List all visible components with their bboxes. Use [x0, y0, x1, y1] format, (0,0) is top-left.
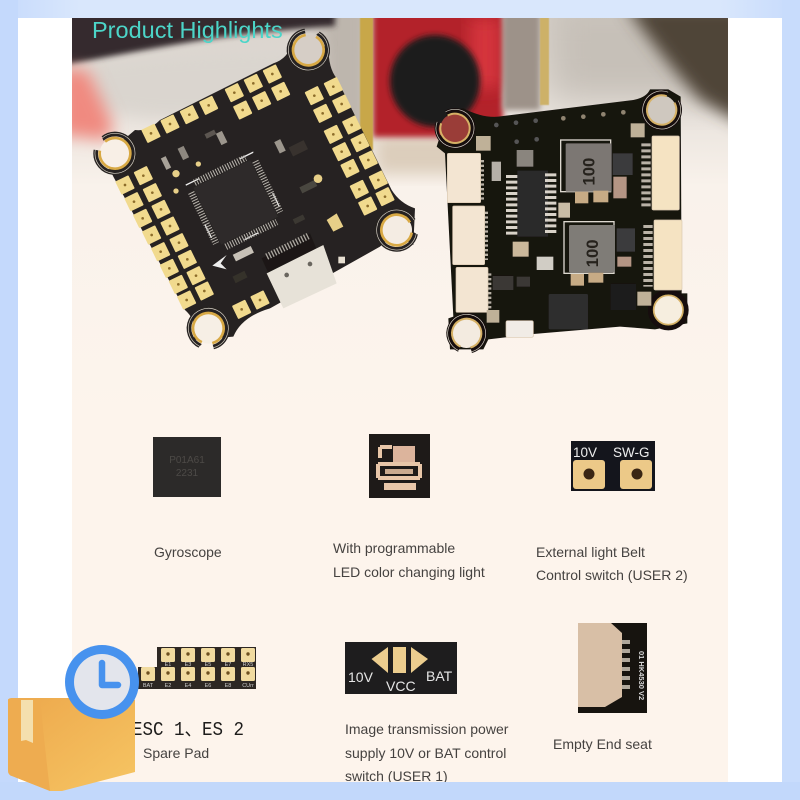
icon: spare pad strip: CUrr: [242, 683, 254, 689]
icon: VCC solder pads: 10V: [348, 669, 374, 685]
icon: spare pad strip: E4: [185, 683, 191, 689]
label: image transmission power: [345, 721, 509, 784]
icon: spare pad strip: RX5: [243, 662, 253, 668]
feature: image transmission power: [345, 642, 509, 784]
label: external light belt: External light Belt: [536, 544, 645, 560]
label: LED: With programmable: [333, 540, 455, 556]
icon: 10V SW-G pads: 10V: [573, 445, 597, 460]
label: image transmission power: switch (USER 1): [345, 768, 448, 784]
label: gyroscope: Gyroscope: [154, 544, 222, 560]
small components: [476, 110, 651, 329]
feature: spare pad: [132, 647, 256, 761]
main processor chip: [186, 152, 286, 252]
power inductors marked 100: [561, 140, 615, 273]
icon: 10V SW-G pads: SW-G: [613, 445, 650, 460]
mounting holes: [87, 23, 420, 355]
power inductors marked 100: 100: [583, 239, 602, 267]
icon: spare pad strip: BAT: [143, 683, 154, 689]
label: spare pad: Spare Pad: [143, 745, 209, 761]
icon: connector seat: 01 HK4530 V2: [637, 651, 646, 700]
icon: clock: [65, 645, 139, 719]
icon: spare pad strip: E5: [205, 662, 211, 668]
icon: spare pad strip: E3: [185, 662, 191, 668]
board body: [100, 43, 415, 340]
icon: 10V SW-G pads: [571, 441, 655, 491]
icon: VCC solder pads: VCC: [386, 678, 416, 694]
icon: gyroscope chip: 2231: [176, 468, 199, 479]
label: external light belt: [536, 544, 688, 583]
flight controller board, back: [429, 84, 688, 359]
label: external light belt: Control switch (USER 2): [536, 567, 688, 583]
icon: spare pad strip: E2: [165, 683, 171, 689]
icon: LED chip: [369, 434, 430, 498]
feature: LED: [333, 434, 485, 580]
icon: VCC solder pads: BAT: [426, 668, 453, 684]
feature: gyroscope: [153, 437, 222, 560]
mounting holes: [429, 84, 688, 359]
label: image transmission power: supply 10V or BAT control: [345, 745, 506, 761]
label: LED: LED color changing light: [333, 564, 485, 580]
driver chip: [512, 171, 551, 237]
label: LED: [333, 540, 485, 580]
label: image transmission power: Image transmission power: [345, 721, 509, 737]
icon: spare pad strip: E1: [165, 662, 171, 668]
board body: [437, 89, 687, 349]
flight controller board, front: [87, 23, 420, 355]
small components: [161, 130, 345, 283]
cream connectors: [447, 136, 682, 337]
feature: external light belt switch: [536, 441, 688, 583]
feature: empty end seat: [553, 623, 652, 752]
USB-C connector: [262, 233, 337, 308]
label: empty end seat: Empty End seat: [553, 736, 652, 752]
icon: spare pad strip: [138, 647, 256, 689]
heading: ESC 1, ES 2: ESC 1、ES 2: [132, 719, 244, 741]
title: Product Highlights: [92, 17, 283, 43]
solder pads: [115, 64, 395, 319]
power inductors marked 100: 100: [580, 158, 599, 186]
icon: gyroscope chip: [153, 437, 221, 497]
icon: spare pad strip: E8: [225, 683, 231, 689]
icon: spare pad strip: E7: [225, 662, 231, 668]
icon: gyroscope chip: P01A61: [169, 455, 205, 466]
icon: VCC solder pads: [345, 642, 457, 694]
icon: spare pad strip: E6: [205, 683, 211, 689]
icon: delivery box: [8, 698, 135, 791]
